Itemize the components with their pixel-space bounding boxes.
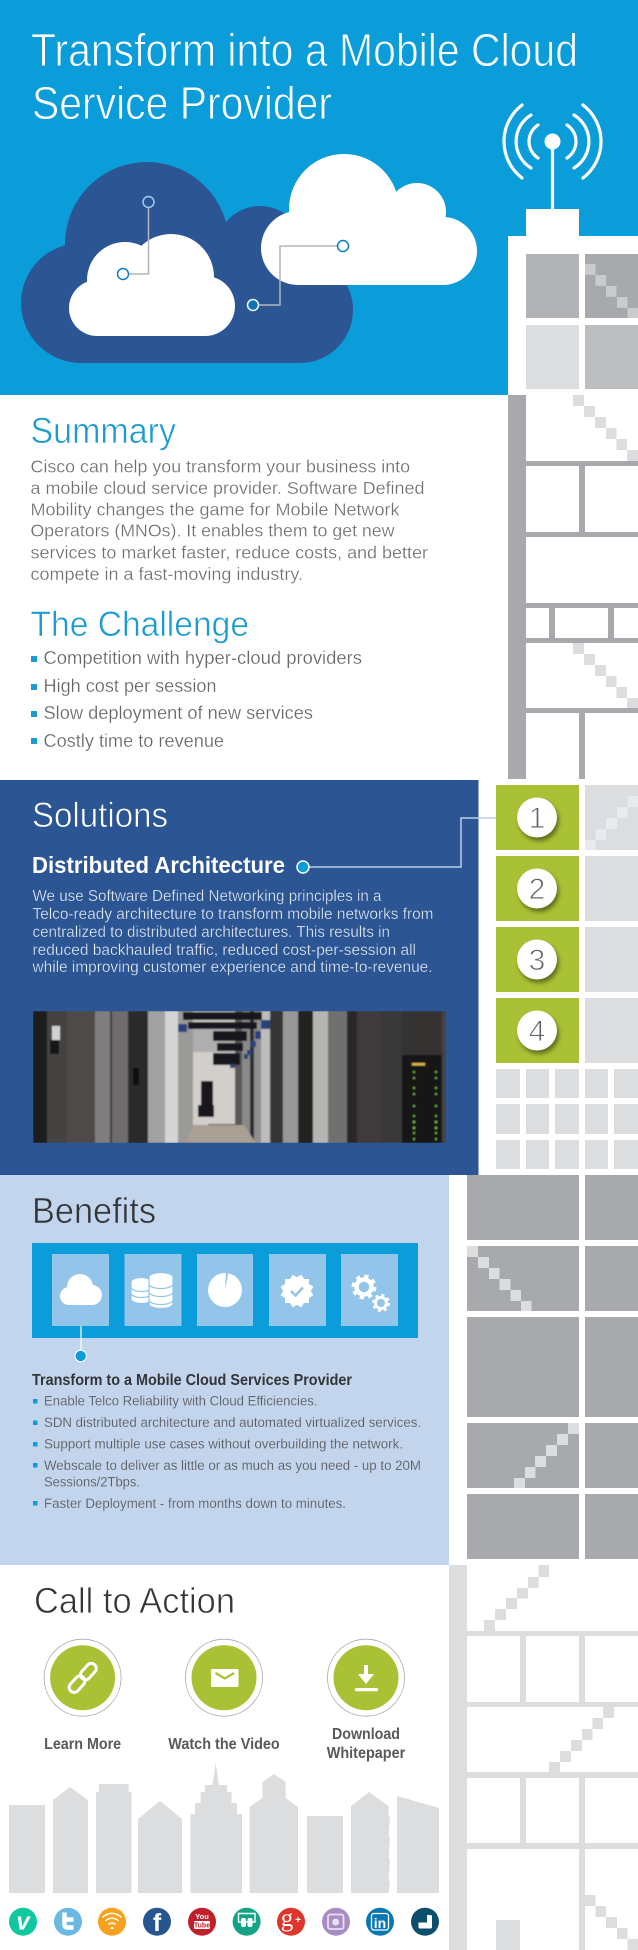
icon: google plus: g (281, 1905, 294, 1932)
text block: summary paragraph (30, 457, 428, 584)
heading: Solutions: Solutions (32, 796, 168, 835)
heading: Distributed Architecture: Distributed Architecture (32, 852, 285, 878)
panel: call to action (0, 1565, 638, 1950)
text block: solutions paragraph (32, 888, 433, 976)
icon: pie chart (208, 1272, 242, 1307)
icon: envelope (211, 1669, 238, 1687)
panel: header (0, 0, 638, 395)
icon: antenna signal (504, 105, 601, 210)
tile 3: 3 (529, 944, 545, 977)
tile 2 (496, 856, 579, 921)
icon: database stacks (131, 1272, 173, 1308)
icon: instagram (322, 1908, 350, 1936)
illustration: small white cloud (69, 234, 235, 336)
building: grey windows beside tiles (496, 785, 638, 1169)
icon: cloud (60, 1274, 102, 1305)
icon: page (411, 1908, 439, 1936)
icon: youtube (188, 1908, 216, 1936)
icon: linkedin: in (374, 1915, 386, 1931)
icon: youtube: You (195, 1912, 209, 1921)
icon: vimeo (9, 1908, 37, 1936)
text block: solutions paragraph: centralized to distributed architectures. This results in (32, 924, 390, 941)
list: challenges: Competition with hyper-cloud providers (44, 648, 362, 668)
panel: benefits (0, 1175, 638, 1565)
list: benefits: Faster Deployment - from months down to minutes. (44, 1496, 346, 1511)
text block: solutions paragraph: Telco-ready architecture to transform mobile networks from (32, 906, 434, 923)
connector: small cloud nodes (118, 196, 154, 280)
tile 4: 4 (529, 1015, 545, 1048)
building: grey outline frame (508, 395, 638, 779)
icon: facebook (143, 1908, 171, 1937)
icon strip (32, 1243, 418, 1338)
text block: solutions paragraph: while improving customer experience and time-to-revenue. (32, 959, 432, 976)
panel: summary and challenge (0, 395, 638, 780)
subheading: transform list: Transform to a Mobile Cloud Services Provider (32, 1372, 352, 1389)
button: Learn More: Learn More (44, 1736, 121, 1753)
heading: The Challenge: The Challenge (30, 605, 249, 644)
tile 3 (496, 927, 579, 992)
tile 1 (496, 785, 579, 850)
illustration: large white cloud (261, 154, 477, 285)
tile 4 (496, 998, 579, 1063)
text block: summary paragraph: Operators (MNOs). It enables them to get new (30, 521, 395, 541)
list: benefits: SDN distributed architecture and automated virtualized services. (44, 1415, 421, 1430)
illustration: city skyline (9, 1763, 439, 1893)
icon: slideshare (233, 1908, 261, 1936)
list: benefits: Enable Telco Reliability with Cloud Efficiencies. (44, 1394, 318, 1409)
icon: vimeo: v (16, 1908, 31, 1936)
list: benefits: Support multiple use cases without overbuilding the network. (44, 1437, 403, 1452)
photo: data center corridor (33, 1011, 446, 1143)
building: dark grey windows (467, 1175, 638, 1559)
list: challenges (31, 648, 362, 751)
title (31, 24, 578, 129)
icon: google plus (277, 1905, 305, 1936)
heading: Summary: Summary (30, 410, 176, 451)
icon: download arrow (355, 1665, 378, 1691)
tile 1: 1 (529, 802, 545, 835)
button: Download Whitepaper: Download (332, 1726, 400, 1743)
social icons row (9, 1905, 439, 1937)
icon: youtube: Tube (194, 1923, 210, 1930)
text block: summary paragraph: Cisco can help you transform your business into (30, 457, 410, 477)
text block: summary paragraph: services to market faster, reduce costs, and better (30, 542, 428, 562)
list: challenges: Slow deployment of new services (44, 703, 313, 723)
title: Transform into a Mobile Cloud (31, 24, 578, 76)
icon: link (67, 1661, 98, 1694)
building: light grey outline frame (449, 1565, 638, 1950)
icon: verified badge (281, 1275, 313, 1307)
button: Watch the Video (168, 1639, 280, 1753)
icon: gears (354, 1276, 388, 1310)
connector: strip to list (75, 1326, 86, 1362)
list: challenges: Costly time to revenue (44, 731, 224, 751)
title: Service Provider (32, 77, 332, 129)
icon: google plus: + (295, 1915, 301, 1926)
button: Watch the Video: Watch the Video (168, 1736, 280, 1753)
list: benefits (33, 1394, 421, 1511)
text block: solutions paragraph: We use Software Defined Networking principles in a (32, 888, 382, 905)
text block: summary paragraph: compete in a fast-moving industry. (30, 564, 303, 584)
icon: facebook: f (153, 1909, 162, 1937)
heading: Call to Action: Call to Action (34, 1580, 235, 1621)
icon: wifi feed (98, 1908, 126, 1936)
list: benefits: Sessions/2Tbps. (44, 1475, 140, 1490)
text block: summary paragraph: a mobile cloud service provider. Software Defined (30, 478, 424, 498)
button: Download Whitepaper (327, 1639, 405, 1762)
list: challenges: High cost per session (44, 676, 217, 696)
list: benefits: Webscale to deliver as little or as much as you need - up to 20M (44, 1458, 421, 1473)
button: Download Whitepaper: Whitepaper (327, 1745, 405, 1762)
text block: summary paragraph: Mobility changes the game for Mobile Network (30, 500, 400, 520)
button: Learn More (44, 1639, 121, 1753)
tile 2: 2 (529, 873, 545, 906)
illustration: dark blue cloud (21, 162, 353, 363)
heading: Benefits: Benefits (32, 1190, 156, 1231)
text block: solutions paragraph: reduced backhauled traffic, reduced cost-per-session all (32, 942, 416, 959)
building: rooftop with windows (508, 209, 638, 395)
connector: architecture to tile 1 (297, 818, 496, 873)
connector: large cloud nodes (248, 240, 348, 310)
panel: solutions (0, 780, 638, 1175)
icon: twitter (54, 1908, 82, 1936)
icon: linkedin (366, 1908, 394, 1936)
